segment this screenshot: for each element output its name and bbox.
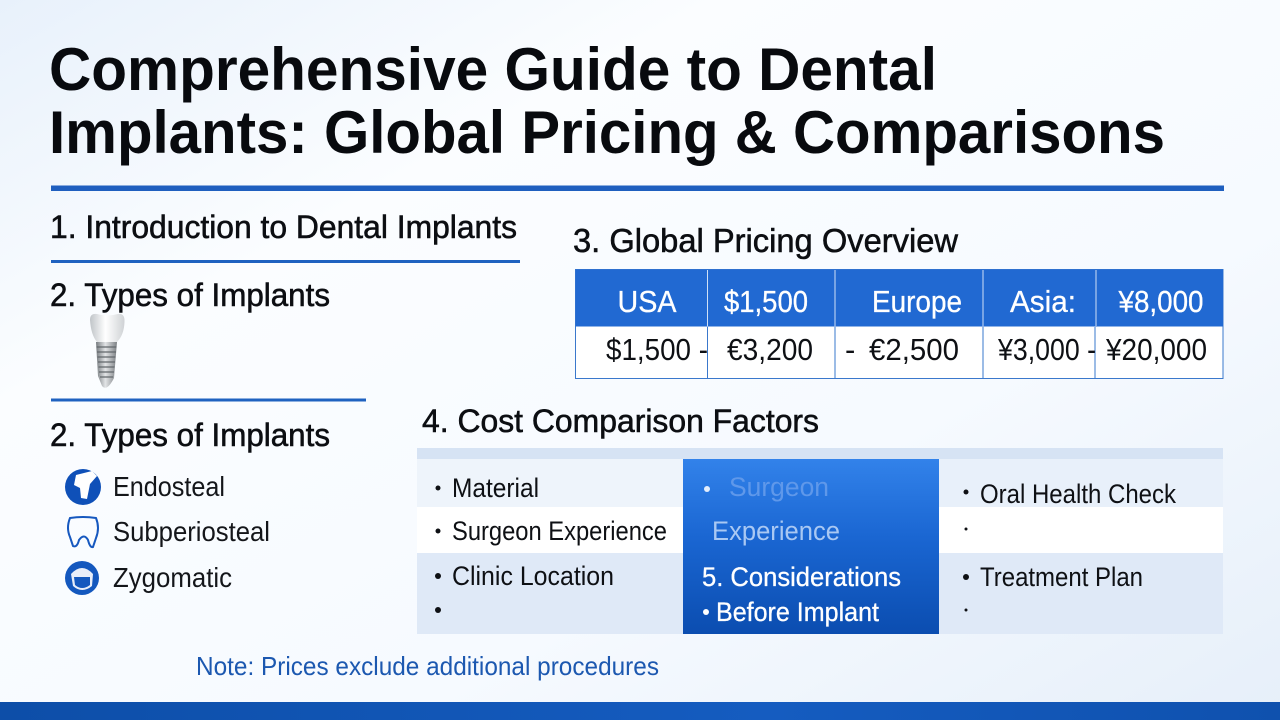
section 2 heading, upper: 2. Types of Implants — [50, 277, 330, 313]
title — [49, 36, 1165, 166]
note: Note: Prices exclude additional procedures — [196, 651, 659, 681]
label: subperiosteal: Subperiosteal — [113, 516, 270, 547]
considerations list, right — [963, 479, 1176, 612]
table header: Asia: — [1010, 284, 1076, 319]
factor list, left — [435, 473, 667, 613]
table values: ¥20,000 — [1105, 332, 1207, 367]
table header: Europe — [872, 284, 962, 319]
title: Implants: Global Pricing & Comparisons — [49, 99, 1165, 166]
panel: highlighted column: 5. Considerations — [702, 562, 901, 592]
label: endosteal: Endosteal — [113, 471, 225, 502]
considerations list, right: Treatment Plan — [980, 562, 1143, 592]
table header: ¥8,000 — [1118, 284, 1204, 319]
cost comparison grid — [417, 448, 1223, 634]
section 2 heading, lower: 2. Types of Implants — [50, 417, 330, 453]
table values — [606, 332, 1207, 367]
factor list, left: Clinic Location — [452, 561, 614, 591]
table header: $1,500 — [724, 284, 808, 319]
table values: €2,500 — [869, 332, 959, 367]
panel: highlighted column: Before Implant — [716, 597, 879, 627]
panel: highlighted column: Experience — [712, 516, 840, 546]
icon: zygomatic — [65, 561, 99, 595]
footer bar — [0, 702, 1280, 720]
considerations list, right: Oral Health Check — [980, 479, 1176, 509]
table values: €3,200 — [727, 332, 813, 367]
table header — [618, 284, 1204, 319]
table values: $1,500 - — [606, 332, 708, 367]
panel: highlighted column: Surgeon — [729, 472, 829, 502]
factor list, left: Surgeon Experience — [452, 516, 667, 546]
pricing table — [576, 270, 1223, 378]
table header: USA — [618, 284, 677, 319]
table values: ¥3,000 - — [997, 332, 1096, 367]
icon: dental implant — [90, 314, 125, 388]
section 4 heading: 4. Cost Comparison Factors — [422, 403, 819, 439]
table values: - — [845, 332, 855, 367]
factor list, left: Material — [452, 473, 539, 503]
section 1 heading: 1. Introduction to Dental Implants — [50, 209, 517, 245]
icon: subperiosteal — [68, 517, 98, 547]
icon: endosteal — [65, 469, 101, 505]
title: Comprehensive Guide to Dental — [49, 36, 937, 103]
implant types list — [65, 469, 270, 595]
label: zygomatic: Zygomatic — [113, 562, 232, 593]
section 3 heading: 3. Global Pricing Overview — [573, 222, 958, 259]
panel: highlighted column — [683, 459, 939, 634]
